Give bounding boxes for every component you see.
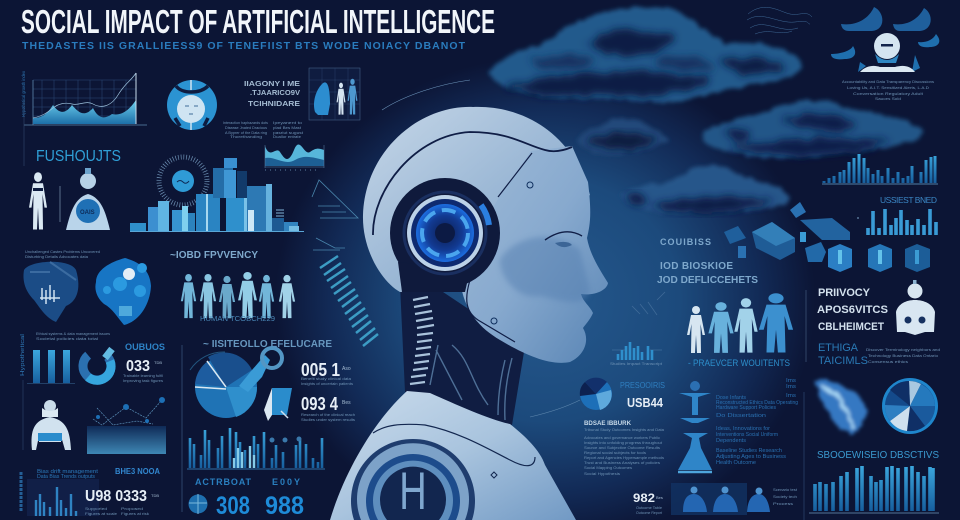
stats: big numbers — [195, 477, 304, 520]
text: job labels: COUIBISS — [660, 237, 711, 247]
text: privacy — [817, 287, 888, 333]
robot neck — [400, 285, 524, 425]
shoulder joint — [351, 439, 475, 520]
stat: u98 0333: Proposed — [121, 507, 143, 511]
label: workers: - PRAEVCER WOUITENTS — [688, 358, 790, 368]
text block: tower notes: Ideas, Innovations for — [716, 426, 770, 432]
helmet — [363, 107, 590, 292]
stat: 982: Outcome Report — [636, 511, 662, 515]
stat: 005: Aso — [342, 366, 351, 372]
text: job labels — [657, 237, 758, 286]
ear lower housing — [398, 262, 470, 292]
text block: tower notes: Baseline Studies Research — [716, 448, 782, 454]
heading: fushoujts: FUSHOUJTS — [36, 148, 121, 165]
stat: 033: Improving task figures — [123, 379, 163, 383]
text block: top labels: TCIHNIDARE — [248, 99, 300, 108]
subtitle: THEDASTES IIS GRALLIEESS9 OF TENEFIIST BTS WODE NOIACY DBANOT — [22, 40, 466, 52]
stat: usb44: PRESOOIRIS — [620, 380, 665, 390]
small text: job note — [25, 250, 100, 259]
text block: tower notes: Adjusting Ages to Business — [716, 454, 787, 460]
neck ribs — [410, 297, 434, 384]
map: dark blob — [23, 262, 78, 322]
stat: usb44: USB44 — [627, 395, 664, 410]
chart: ring — [77, 346, 117, 386]
small text: notes — [223, 121, 303, 139]
chart: right bars 1 — [822, 154, 938, 184]
stat: u98 0333: Figures at risk — [121, 512, 149, 516]
face — [460, 146, 608, 363]
text: ethics: Discover Terminology neighbors and — [866, 348, 940, 352]
stats: big numbers: 988 — [265, 492, 304, 520]
icon: blue wisp — [815, 379, 868, 433]
panel: figure strip — [671, 483, 797, 515]
divider line — [803, 392, 805, 520]
clouds — [490, 7, 924, 213]
text: lower left note: Bias drift management — [37, 469, 99, 475]
chart: network line — [87, 397, 166, 454]
stat: u98 0333: TDB — [151, 493, 159, 498]
small text: notes: Ipeyanent to — [273, 121, 302, 125]
text block: tower notes: Dose Infants — [716, 395, 747, 401]
stat: 005: Benefit study clinical data — [301, 377, 351, 381]
icon: triangle stripes — [312, 180, 358, 250]
letter H: H — [399, 461, 427, 520]
map: bright blob — [95, 258, 151, 325]
text block: tower notes: Hardware Support Policies — [716, 405, 776, 411]
robot figure — [330, 107, 608, 520]
small text: robot caption — [842, 80, 934, 101]
small text: notes: pasriut sugust — [273, 131, 303, 135]
stat: 005: 005 1 — [301, 360, 340, 380]
chart: small center bars: Studies Impact Transcript — [610, 362, 662, 366]
text block: lower middle: Regional social subjects for tools — [584, 451, 646, 455]
divider line — [805, 290, 807, 362]
icon group: large people — [687, 293, 793, 353]
thin arcs — [382, 80, 470, 110]
robot body — [330, 391, 576, 520]
text block: lower middle: Trust and Business Analyses of policies — [584, 461, 660, 465]
text block: lower middle: Advocates and governance workers Public — [584, 436, 660, 440]
stat: u98 0333: U98 0333 — [85, 488, 147, 505]
small text: bars note: Societal policies data total — [36, 337, 98, 341]
text block: tower notes: Ims — [786, 393, 797, 399]
text block: tower notes: Health Outcome — [716, 460, 756, 466]
text block: tower notes: Dependents — [716, 438, 747, 444]
text block: tower notes — [716, 378, 798, 466]
text block: lower middle: BDSAE IBBURK — [584, 420, 631, 427]
text: ethics: TAICIMLS — [818, 355, 868, 367]
small text: robot caption: Loving Us, A.I.T. Sensitized Alerts, L.A.D — [847, 86, 929, 90]
chart: pie with wrench — [190, 348, 282, 418]
side label: Hypothetical — [20, 334, 26, 376]
cloud: small — [577, 118, 669, 155]
doodle lines — [632, 292, 665, 315]
stats: big numbers: 308 — [216, 492, 250, 520]
text: privacy: PRIIVOCY — [818, 287, 871, 299]
panel: figure strip: Society tech — [773, 495, 797, 499]
small text: notes: A Byprer of the Data ring — [225, 131, 267, 135]
cloud: lower — [621, 165, 789, 213]
small text: robot caption: Sauces Sold — [875, 97, 901, 101]
cloud: right — [701, 100, 924, 158]
panel: figure strip: Scenario test — [773, 488, 797, 492]
panel: people chart — [309, 68, 360, 120]
small text: bars note: Ethical systems & data management issues — [36, 332, 110, 336]
jaw seam — [467, 280, 515, 342]
text: job labels: IOD BIOSKIOE — [660, 261, 733, 272]
chart: small pie — [530, 378, 612, 417]
small text: notes: Thorethanding — [230, 135, 262, 139]
stat: 093: Studies under system results — [301, 418, 355, 422]
text block: lower middle: Insights into unfolding progress throughout — [584, 441, 662, 445]
text block: lower middle: Social Hypothesis — [584, 472, 620, 476]
icon: human figure — [24, 100, 60, 230]
icon: robot bust — [32, 400, 71, 450]
stat: 033: OUBUOS — [125, 342, 165, 352]
chart: small center bars — [610, 342, 662, 366]
text block: tower notes: Ims — [786, 378, 797, 384]
face shading — [500, 237, 590, 302]
panel: figure strip: Process — [773, 502, 793, 506]
face dots — [491, 182, 533, 324]
text block: tower notes: Ims — [786, 384, 797, 390]
text: ethics: Technology Business Data Ontario — [868, 354, 938, 358]
icon: globe — [188, 494, 208, 514]
line doodle: waves — [747, 7, 812, 34]
small text: job note: Disturbing Details Advocates data — [25, 255, 88, 259]
chart: three bars — [27, 350, 75, 384]
helmet seam — [373, 132, 572, 235]
small text: notes: Duallor entrate — [273, 135, 301, 139]
text block: lower middle: Social Mapping Outcomes — [584, 466, 632, 470]
icon: robot torso — [896, 280, 935, 335]
icon group: hexagons — [828, 244, 930, 272]
text block: top labels: .TJAARICO9V — [250, 88, 300, 97]
stat: 033: TDB — [154, 360, 162, 365]
small text: notes: Interaction haphazards dots — [223, 121, 268, 125]
stat: 033 — [123, 342, 165, 383]
ear disk — [404, 192, 489, 274]
stat: 982: Bes — [656, 495, 663, 500]
chart: area trend — [21, 70, 147, 125]
text: privacy: APOS6VITCS — [817, 304, 888, 316]
small text: job note: Unchallenged Castes Problems Uncovered — [25, 250, 100, 254]
stat: 033: 033 — [126, 358, 150, 375]
stats: big numbers: ACTRBOAT — [195, 477, 252, 487]
stat: 033: Trainable learning fulfil — [123, 374, 163, 378]
icon: tower — [678, 381, 712, 472]
text block: top labels — [244, 79, 300, 108]
small text: notes: Disease Jnated Dracious — [225, 126, 267, 130]
stats: big numbers: E00Y — [272, 477, 300, 487]
icon: radial sun — [159, 157, 207, 205]
chart: healthcare bars — [187, 428, 325, 469]
icon: robot with moons — [831, 7, 939, 72]
stat: u98 0333: Figures at scale — [85, 512, 117, 516]
text block: tower notes: Do Dissertation — [716, 413, 766, 419]
stat: 005 — [301, 360, 353, 386]
stat: 093: Bes — [342, 400, 351, 406]
shoulder seam — [373, 424, 535, 466]
text: lower left note: Data Bias Trends outputs — [37, 474, 96, 480]
stat: 982: Outcome Table — [636, 506, 662, 510]
stat: 093 — [301, 394, 355, 422]
text block: lower middle — [584, 420, 664, 476]
heading: job frequency: ~IOBD FPVVENCY — [170, 250, 258, 261]
text: ethics: ETHIGA — [818, 342, 859, 354]
icon group: workers — [181, 272, 295, 318]
text block: lower middle: Source and Subjective Outcome Results — [584, 446, 660, 450]
chart: right bars 2 — [857, 209, 936, 235]
icon: seated robot — [66, 168, 110, 230]
label: human: HUMAN TCOBCH229 — [200, 316, 275, 323]
heading: healthcare: ~ IISITEOLLO EFELUCARE — [203, 339, 332, 350]
chart: area trend: Hypothetical growth index — [21, 70, 26, 117]
small text: robot caption: Accountability and Data Transparency Discussions — [842, 80, 934, 84]
chart: small wave — [265, 145, 324, 170]
ear housing — [390, 178, 500, 288]
chart: objective bars — [809, 466, 939, 513]
hatch band — [320, 256, 378, 346]
stat: usb44 — [620, 380, 665, 410]
text block: lower middle: Tribunal Study Outcomes Insights and Data — [584, 428, 664, 432]
title: SOCIAL IMPACT OF ARTIFICIAL INTELLIGENCE — [21, 3, 495, 40]
cloud: large — [490, 7, 802, 102]
divider line — [22, 380, 24, 450]
small text: notes: plad Bes Mast — [273, 126, 301, 130]
label: bhe3: BHE3 NOOA — [115, 467, 160, 476]
icon group: isometric boxes — [724, 202, 850, 262]
stat: 093: 093 4 — [301, 394, 338, 414]
text block: top labels: IIAGONY I ME — [244, 79, 300, 88]
icon: seated robot: OAIS — [80, 210, 95, 216]
neck strands — [430, 345, 512, 420]
text block: lower middle: Report and Agencies Hypersample methods — [584, 456, 664, 460]
stat: 982: 982 — [633, 491, 655, 505]
stat: u98 0333 — [85, 488, 159, 516]
small text: bars note — [36, 332, 110, 341]
chart: lower left bars — [21, 472, 99, 516]
icon: tablet — [264, 388, 292, 421]
chart: city bars — [130, 158, 304, 232]
text block: tower notes: Reconstructed Ethics Data Operating — [716, 400, 798, 406]
text: ethics — [818, 342, 940, 367]
text block: tower notes: Interventions Social Uniform — [716, 432, 778, 438]
text: ethics: Consensus ethics — [868, 360, 908, 364]
text: privacy: CBLHEIMCET — [818, 321, 884, 333]
text: job labels: JOD DEFLICCEHETS — [657, 275, 758, 286]
stat: 005: Insights of uncertain patients — [301, 382, 353, 386]
stat: 093: Research of the clinical reach — [301, 413, 355, 417]
heading: ussiest bned: USSIEST BNED — [880, 195, 937, 205]
chart: right pie — [882, 378, 938, 434]
text: lower left note — [37, 469, 99, 480]
stat: 982 — [633, 491, 663, 515]
divider line — [181, 345, 183, 512]
stat: u98 0333: Supported — [85, 507, 107, 511]
icon: face circle — [167, 80, 217, 130]
heading: objectives: SBOOEWISEIO DBSCTIVS — [817, 449, 939, 461]
small text: robot caption: Conversation Regulatory Adult — [853, 92, 923, 96]
